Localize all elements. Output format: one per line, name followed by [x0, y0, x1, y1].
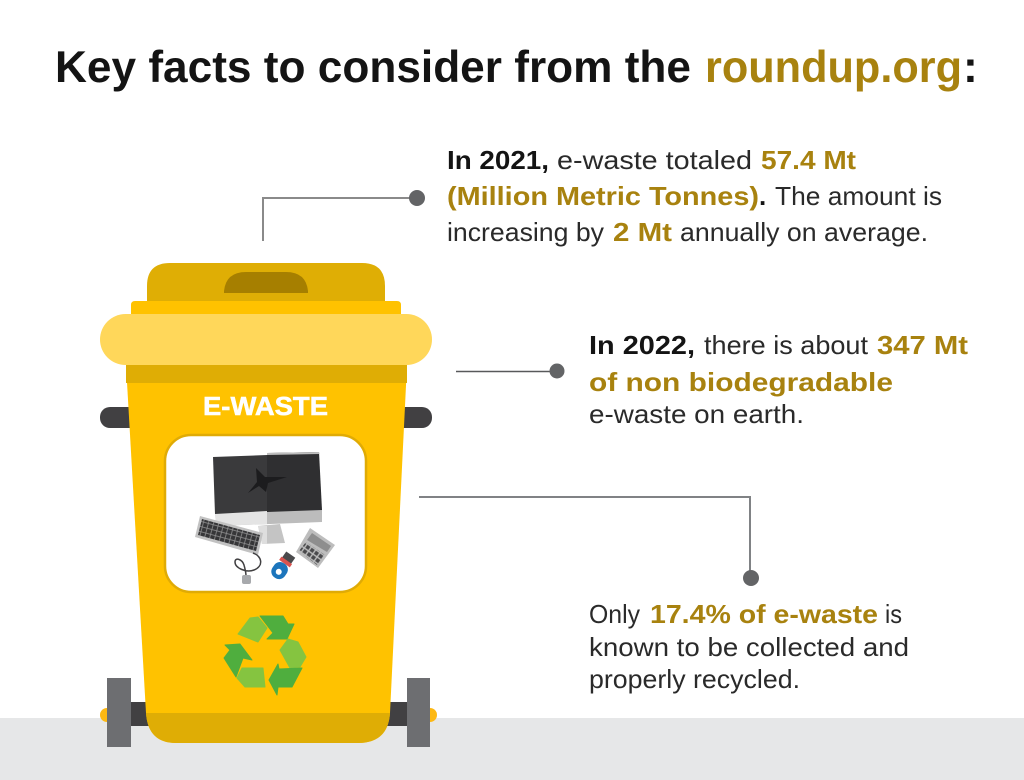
callout text 1: 2 Mt — [613, 217, 672, 247]
lid — [131, 263, 401, 316]
icon: USB drive — [269, 550, 297, 582]
side handles — [100, 407, 432, 428]
callout text 2: there is about — [704, 330, 869, 360]
callout text 1: 57.4 Mt — [761, 145, 856, 175]
window panel — [165, 435, 366, 592]
callout connector 1 — [263, 190, 425, 241]
callout text 2 — [589, 330, 968, 429]
icon: broken monitor — [213, 452, 322, 544]
callout text 2: In 2022, — [589, 330, 695, 360]
callout text 1: annually on average. — [680, 217, 928, 247]
title: Key facts to consider from the — [55, 43, 691, 92]
icon: cable and plug — [235, 553, 261, 584]
body shadow bands — [126, 360, 407, 743]
callout text 2: of non biodegradable — [589, 367, 893, 397]
waste bin — [100, 263, 437, 747]
callout text 1: increasing by — [447, 217, 604, 247]
callout text 3: properly recycled. — [589, 664, 800, 694]
callout text 3: known to be collected and — [589, 632, 909, 662]
bin label: E-WASTE — [203, 393, 328, 421]
icon: keyboard — [195, 516, 263, 555]
icon: recycle symbol — [224, 616, 306, 695]
callout text 1: In 2021, — [447, 145, 549, 175]
callout text 3: is — [885, 599, 902, 629]
ground — [0, 718, 1024, 780]
callout connector 2 — [456, 364, 564, 378]
callout text 1: e-waste totaled — [557, 145, 752, 175]
title: : — [963, 43, 978, 92]
callout text 3 — [589, 599, 909, 694]
bin body — [126, 365, 407, 743]
callout text 2: 347 Mt — [877, 330, 968, 360]
icon: calculator — [296, 528, 335, 568]
callout connector 3 — [419, 497, 759, 586]
callout text 1: (Million Metric Tonnes) — [447, 181, 759, 211]
title — [55, 43, 978, 92]
wheels and axle — [100, 678, 437, 747]
callout text 3: Only — [589, 599, 640, 629]
callout text 1: The amount is — [775, 181, 942, 211]
callout text 3: 17.4% of e-waste — [650, 599, 878, 629]
callout text 2: e-waste on earth. — [589, 399, 804, 429]
rim — [100, 314, 432, 365]
callout text 1 — [447, 145, 942, 247]
title: roundup.org — [705, 43, 962, 92]
callout text 1: . — [759, 181, 766, 211]
